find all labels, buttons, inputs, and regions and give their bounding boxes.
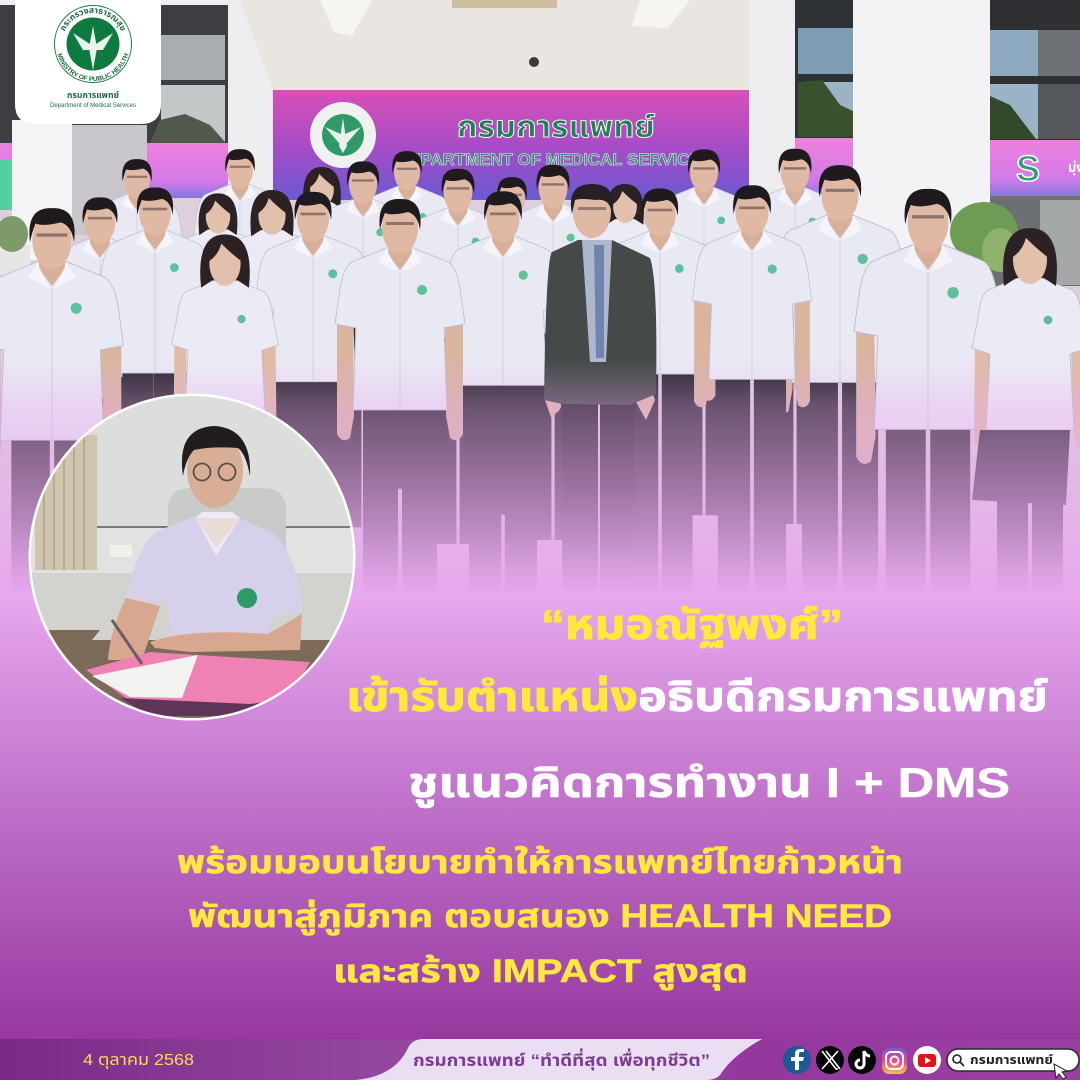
search box: กรมการแพทย์ (970, 1053, 1053, 1067)
icon: ministry seal: กระทรวงสาธารณสุข (61, 8, 126, 32)
logo name: กรมการแพทย์ (67, 90, 119, 100)
suited man (544, 184, 656, 590)
footer band (0, 1039, 1080, 1080)
slogan banner: กรมการแพทย์ “ทำดีที่สุด เพื่อทุกชีวิต” (413, 1048, 710, 1071)
logo card: Department of Medical Services (50, 102, 136, 109)
body text: policy lines: และสร้าง IMPACT สูงสุด (333, 953, 748, 990)
body text: policy lines: พร้อมมอบนโยบายทำให้การแพทย์ไทยก้าวหน้า (177, 844, 903, 880)
subheading: I + DMS: ชูแนวคิดการทำงาน I + DMS (408, 759, 1010, 808)
headline: director general: อธิบดีกรมการแพทย์ (638, 673, 1048, 720)
building signage: กรมการแพทย์ (457, 111, 655, 144)
body text: policy lines (177, 844, 903, 990)
icon: youtube (913, 1046, 941, 1074)
logo card (15, 0, 161, 124)
icon: facebook (783, 1046, 811, 1074)
headline: appointment: เข้ารับตำแหน่ง (346, 673, 638, 720)
icon: ministry seal: MINISTRY OF PUBLIC HEALTH (58, 53, 128, 81)
gradient fade over photo (0, 360, 1080, 595)
body text: policy lines: พัฒนาสู่ภูมิภาค ตอบสนอง HEALTH NEED (188, 898, 892, 935)
portrait circle (28, 394, 360, 720)
search box (947, 1049, 1079, 1079)
plant (0, 202, 1018, 272)
icon: ministry seal (54, 5, 132, 83)
building signage: S (1016, 148, 1040, 189)
lower purple background (0, 595, 1080, 1040)
headline: doctor name: “หมอณัฐพงศ์” (541, 601, 843, 648)
group photo: staff standing in rows (0, 149, 1080, 724)
icon: instagram (882, 1048, 907, 1074)
slogan banner (356, 1039, 762, 1080)
building signage (310, 102, 1080, 189)
icon: tiktok (848, 1046, 876, 1074)
date: 4 ตุลาคม 2568 (83, 1052, 194, 1069)
building signage: DEPARTMENT OF MEDICAL SERVICES (397, 150, 712, 169)
icon: X (816, 1046, 844, 1074)
icon: cursor (1054, 1064, 1067, 1079)
